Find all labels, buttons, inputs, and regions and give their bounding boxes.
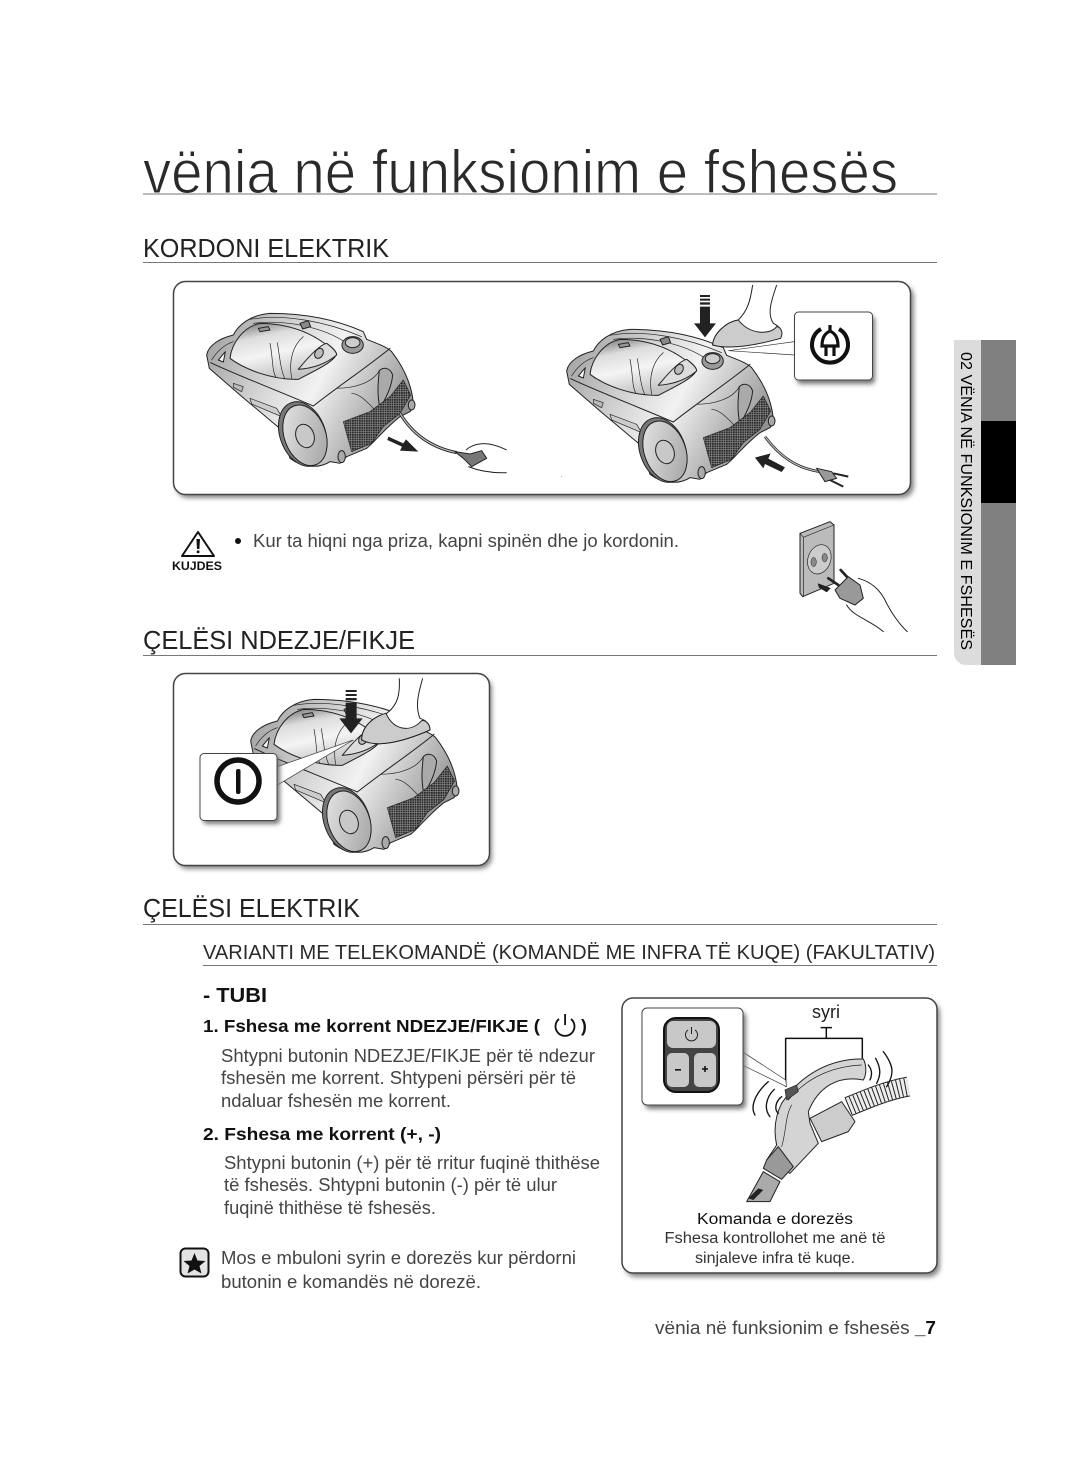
callout: power symbol [200,754,280,824]
caution icon: KUJDES [172,561,222,573]
step 2 text: fuqinë thithëse të fshesës. [224,1198,436,1218]
illustration: vacuum with cord rewinding and foot [567,329,775,489]
caption: Komanda e dorezës [697,1211,853,1228]
step 1 text: Shtypni butonin NDEZJE/FIKJE për të ndezur [221,1046,595,1066]
step 1 heading with power icon: ) [581,1016,587,1036]
note text: butonin e komandës në dorezë. [221,1272,481,1292]
side tab [954,340,1016,665]
illustration: unplugging from wall socket [800,522,907,632]
step 1 text [221,1046,595,1111]
sensor bracket [786,1028,862,1087]
icon: retract arrow and plug [694,285,848,487]
illustration: hose handle [742,1028,908,1202]
panel: handle control [622,998,940,1277]
caution icon [172,532,222,573]
step 1 text: fshesën me korrent. Shtypeni përsëri për të [221,1068,576,1088]
panel: power cord [174,282,914,498]
heading: celesi ndezje/fikje: ÇELËSI NDEZJE/FIKJE [143,627,415,655]
caption: sinjaleve infra të kuqe. [695,1250,855,1267]
callout: cord rewind button [794,312,875,384]
step 1 heading with power icon: 1. Fshesa me korrent NDEZJE/FIKJE ( [203,1016,540,1036]
panel: on/off switch [174,674,492,869]
icon: press arrow [694,295,716,337]
step 2 text: të fshesës. Shtypni butonin (-) për të ulur [224,1175,557,1195]
note text: Mos e mbuloni syrin e dorezës kur përdorni [221,1248,576,1268]
illustration: foot and arrow [277,678,430,785]
heading: kordoni elektrik: KORDONI ELEKTRIK [143,235,389,263]
illustration: vacuum with cord pulled out [207,313,507,473]
step 2 text: Shtypni butonin (+) për të rritur fuqinë thithëse [224,1153,600,1173]
step 2 heading: 2. Fshesa me korrent (+, -) [203,1124,441,1144]
illustration: vacuum pressed by foot [251,699,459,859]
subheading: tubi: - TUBI [203,985,267,1007]
note text [221,1248,576,1292]
caption [664,1211,886,1267]
caption: Fshesa kontrollohet me anë të [664,1230,886,1247]
step 2 text [224,1153,600,1218]
illustration: foot [713,285,782,346]
side tab: 02 VËNIA NË FUNKSIONIM E FSHESËS [957,352,974,650]
infrared waves [753,1052,892,1117]
title: vënia në funksionim e fshesës [143,138,898,206]
heading: celesi elektrik: ÇELËSI ELEKTRIK [143,895,360,923]
step 1 text: ndaluar fshesën me korrent. [221,1091,451,1111]
page footer: vënia në funksionim e fshesës _7 [655,1317,936,1338]
label: syri: syri [812,1002,840,1022]
caution text: Kur ta hiqni nga priza, kapni spinën dhe jo kordonin. [253,531,679,551]
icon: star note [180,1248,208,1276]
subheading: remote variant: VARIANTI ME TELEKOMANDË (KOMANDË ME INFRA TË KUQE) (FAKULTATIV) [203,941,935,964]
callout: handle buttons [642,1008,746,1109]
